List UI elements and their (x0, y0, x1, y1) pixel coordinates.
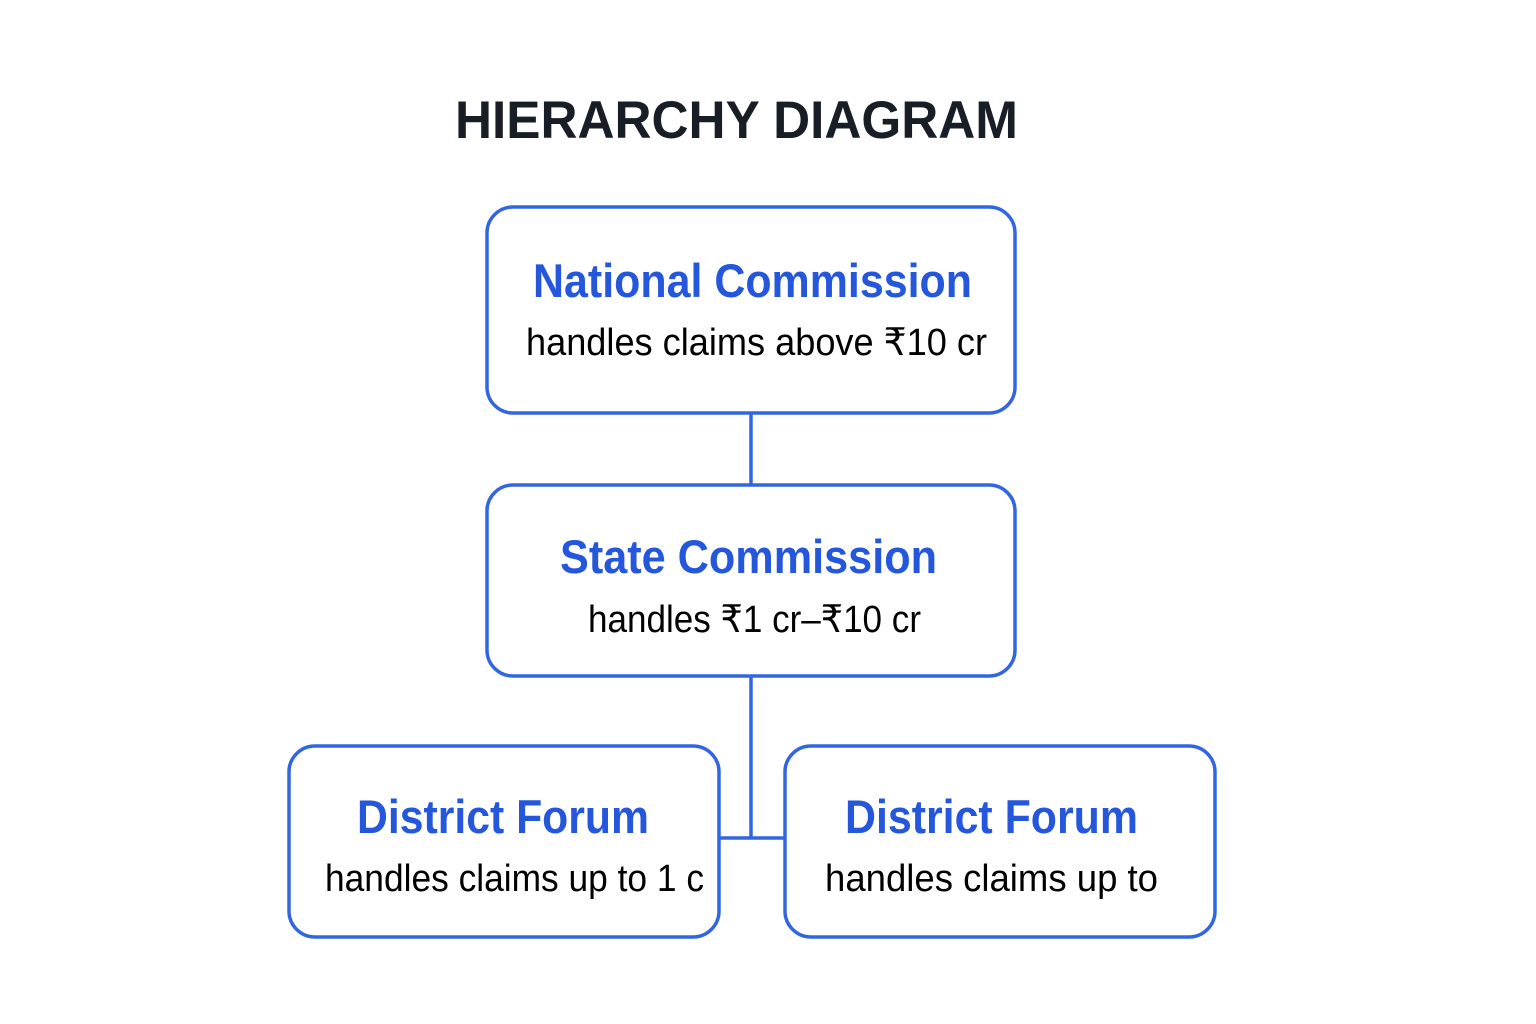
District Forum right description: handles claims up to (825, 858, 1158, 900)
panel: District Forum left (289, 746, 719, 937)
State Commission heading: State Commission (560, 530, 937, 583)
panel: State Commission (487, 485, 1015, 676)
District Forum left heading: District Forum (357, 790, 649, 843)
District Forum left description: handles claims up to 1 c (325, 858, 704, 900)
District Forum right heading: District Forum (845, 790, 1138, 843)
National Commission description: handles claims above ₹10 cr (526, 322, 987, 364)
State Commission description: handles ₹1 cr–₹10 cr (588, 599, 921, 641)
title: HIERARCHY DIAGRAM (455, 91, 1018, 150)
connector: state to district forums (719, 676, 785, 838)
connector: national to state (749, 413, 753, 485)
National Commission heading: National Commission (533, 254, 972, 307)
panel: National Commission (487, 207, 1015, 413)
panel: District Forum right (785, 746, 1215, 937)
